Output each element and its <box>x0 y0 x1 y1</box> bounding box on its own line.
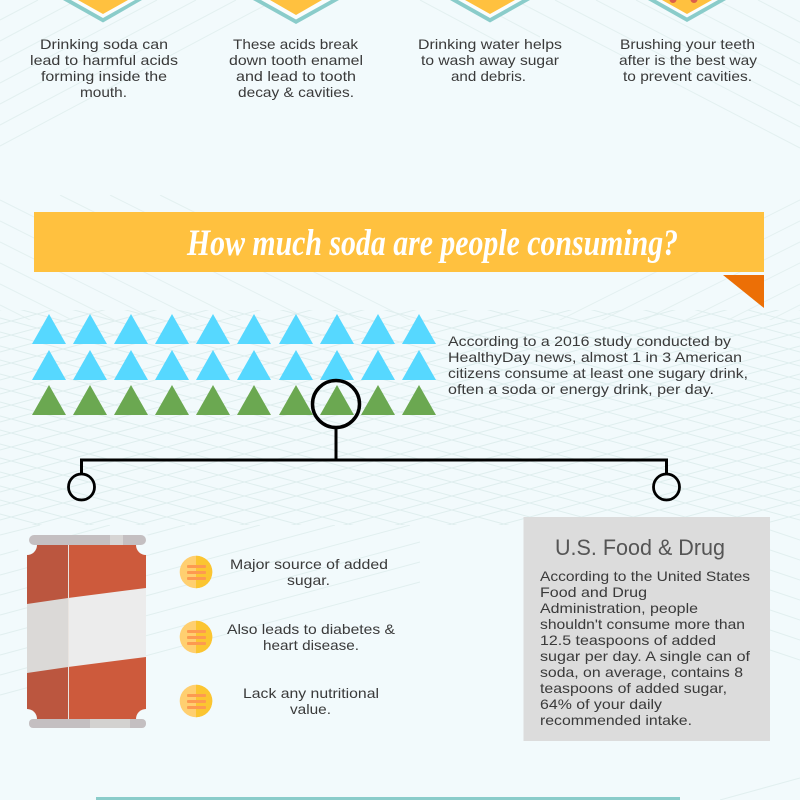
text: HealthyDay study: citizens consume at least one sugary drink, <box>448 365 748 381</box>
text: brushing teeth: to prevent cavities. <box>623 68 752 84</box>
text: enamel decay: These acids break <box>233 36 359 52</box>
text: diabetes: Also leads to diabetes & <box>227 621 396 637</box>
text: soda acids: mouth. <box>80 84 127 100</box>
panel body text: Administration, people <box>540 600 698 616</box>
panel body text: 12.5 teaspoons of added <box>540 632 716 648</box>
heading: How much soda are people consuming? <box>186 223 678 264</box>
banner fold triangle <box>723 275 764 308</box>
text: soda acids: forming inside the <box>41 68 167 84</box>
text: diabetes: heart disease. <box>263 637 359 653</box>
text: drinking water <box>418 36 562 84</box>
text: HealthyDay study: According to a 2016 study conducted by <box>448 333 731 349</box>
text: nutritional value: Lack any nutritional <box>243 685 379 701</box>
icon: soda can <box>17 535 156 729</box>
icon: bullet 3 <box>180 685 212 717</box>
text: nutritional value: value. <box>290 701 331 717</box>
text: brushing teeth: Brushing your teeth <box>620 36 755 52</box>
panel body text <box>540 568 750 728</box>
next section panel top edge <box>96 797 680 800</box>
panel body text: recommended intake. <box>540 712 692 728</box>
panel body text: teaspoons of added sugar, <box>540 680 727 696</box>
panel body text: According to the United States <box>540 568 750 584</box>
icon: diamond badge 4 with tooth brush <box>648 0 726 22</box>
text: diabetes <box>227 621 396 653</box>
icon: bullet 2 <box>180 621 212 653</box>
text: drinking water: to wash away sugar <box>421 52 559 68</box>
panel heading: U.S. Food & Drug <box>555 535 725 560</box>
text: enamel decay <box>229 36 363 100</box>
panel body text: soda, on average, contains 8 <box>540 664 743 680</box>
text: soda acids <box>30 36 178 100</box>
panel body text: sugar per day. A single can of <box>540 648 750 664</box>
connector tree <box>68 380 680 500</box>
text: brushing teeth <box>619 36 757 84</box>
panel body text: 64% of your daily <box>540 696 662 712</box>
panel: U.S. Food & Drug <box>524 517 770 741</box>
text: drinking water: and debris. <box>451 68 526 84</box>
panel body text: Food and Drug <box>540 584 647 600</box>
text: HealthyDay study: HealthyDay news, almost 1 in 3 American <box>448 349 742 365</box>
text: HealthyDay study <box>448 333 748 397</box>
panel body text: shouldn't consume more than <box>540 616 745 632</box>
text: enamel decay: decay & cavities. <box>238 84 354 100</box>
text: HealthyDay study: often a soda or energy drink, per day. <box>448 381 714 397</box>
icon: diamond badge 1 <box>63 0 142 22</box>
icon: diamond badge 2 <box>253 0 339 24</box>
text: enamel decay: down tooth enamel <box>229 52 363 68</box>
text: brushing teeth: after is the best way <box>619 52 757 68</box>
pictogram: triangles, 1 in 3 <box>32 314 436 415</box>
icon: diamond badge 3 <box>450 0 530 22</box>
text: added sugar <box>230 556 388 588</box>
text: enamel decay: and lead to tooth <box>236 68 356 84</box>
text: soda acids: lead to harmful acids <box>30 52 178 68</box>
heading banner <box>34 212 764 272</box>
text: soda acids: Drinking soda can <box>40 36 168 52</box>
text: added sugar: sugar. <box>287 572 330 588</box>
text: drinking water: Drinking water helps <box>418 36 562 52</box>
icon: bullet 1 <box>180 556 212 588</box>
text: nutritional value <box>243 685 379 717</box>
text: added sugar: Major source of added <box>230 556 388 572</box>
